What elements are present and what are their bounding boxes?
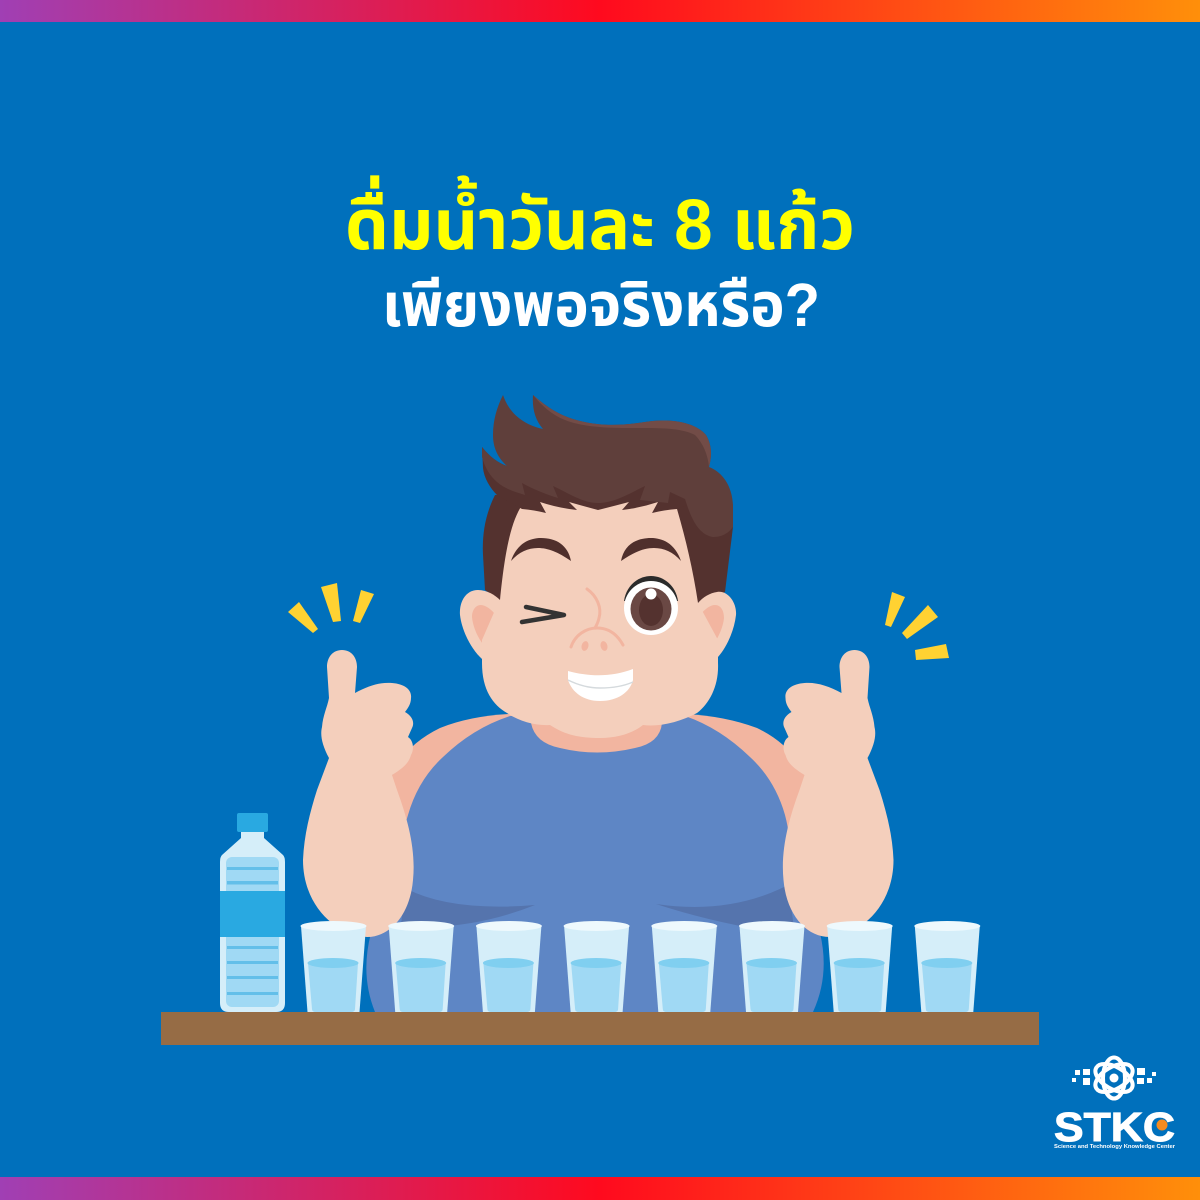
logo orange dot: [1156, 1120, 1168, 1130]
smile: [568, 669, 633, 701]
teeth line: [568, 680, 633, 688]
sparkle rays right: [885, 592, 949, 660]
top hair: [482, 395, 733, 537]
glass 3: [476, 921, 542, 1012]
character: man giving thumbs up: [303, 395, 894, 1012]
neck: [531, 715, 662, 752]
glass 4: [564, 921, 630, 1012]
shirt shadow right: [656, 885, 795, 935]
open eye: [624, 576, 678, 635]
right eyebrow: [621, 538, 681, 561]
right inner ear: [700, 605, 724, 643]
nose: [571, 589, 623, 647]
bottom gradient bar: [0, 1177, 1200, 1200]
glass 2: [388, 921, 454, 1012]
icon: atom: [1091, 1058, 1137, 1098]
shoulders: [392, 714, 805, 860]
left eyebrow: [511, 538, 571, 561]
hair highlight: [533, 395, 711, 467]
glass 8: [914, 921, 980, 1012]
shirt shadow left: [400, 888, 535, 935]
right arm and thumb: [783, 650, 894, 937]
left arm and thumb: [303, 650, 414, 937]
glass 5: [651, 921, 717, 1012]
icon: pixel squares: [1072, 1068, 1156, 1085]
top gradient bar: [0, 0, 1200, 22]
winking eye: [522, 607, 564, 622]
glass 1: [300, 921, 366, 1012]
water bottle: [220, 813, 285, 1012]
title: ดื่มน้ำวันละ 8 แก้ว: [345, 175, 855, 265]
shirt: [366, 716, 824, 1012]
left inner ear: [472, 605, 497, 645]
right ear: [695, 592, 736, 657]
nostrils: [580, 640, 609, 652]
face: [482, 498, 718, 738]
logo tagline: Science and Technology Knowledge Center: [1054, 1144, 1176, 1150]
sparkle rays left: [288, 583, 374, 633]
left ear: [460, 590, 505, 659]
table top: [161, 1012, 1039, 1045]
back hair: [483, 480, 733, 603]
dark fringe hair: [482, 447, 700, 513]
glass 7: [827, 921, 893, 1012]
glass 6: [739, 921, 805, 1012]
subtitle: เพียงพอจริงหรือ?: [382, 271, 820, 339]
STKC logo: [1054, 1058, 1176, 1150]
logo wordmark: STKC: [1054, 1104, 1175, 1150]
